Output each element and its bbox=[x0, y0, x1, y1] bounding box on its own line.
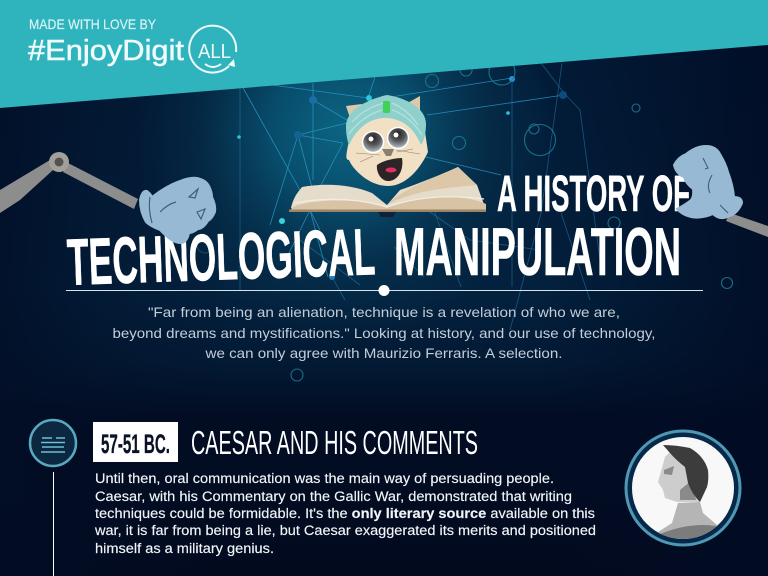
section body text: himself as a military genius. bbox=[95, 541, 274, 556]
section heading: CAESAR AND HIS COMMENTS bbox=[191, 424, 478, 461]
date badge bbox=[93, 422, 178, 462]
logo: made with love by EnjoyDigitAll: MADE WITH LOVE BY bbox=[29, 16, 157, 32]
timeline icon: text document bbox=[30, 420, 76, 466]
header band bbox=[0, 0, 768, 108]
logo: made with love by EnjoyDigitAll: ALL bbox=[198, 41, 231, 63]
intro quote: we can only agree with Maurizio Ferraris. A selection. bbox=[204, 345, 563, 361]
logo: made with love by EnjoyDigitAll: #EnjoyDigit bbox=[28, 35, 184, 67]
open book bbox=[289, 167, 486, 217]
right robotic arm bbox=[726, 213, 768, 237]
intro quote: beyond dreams and mystifications." Looking at history, and our use of technology, bbox=[112, 325, 656, 341]
network lines bbox=[243, 77, 564, 277]
right gloved hand bbox=[674, 146, 742, 218]
section body text: Until then, oral communication was the main way of persuading people. bbox=[95, 471, 554, 486]
section body text: Caesar, with his Commentary on the Gallic War, demonstrated that writing bbox=[95, 489, 572, 504]
intro quote: "Far from being an alienation, technique is a revelation of who we are, bbox=[148, 304, 620, 320]
left gloved hand bbox=[140, 178, 215, 243]
logo: made with love by EnjoyDigitAll bbox=[28, 16, 236, 73]
title rule bbox=[66, 285, 703, 296]
portrait of Caesar bbox=[626, 431, 740, 545]
timeline line bbox=[53, 472, 54, 576]
title: technological: TECHNOLOGICAL bbox=[66, 214, 376, 299]
section body text bbox=[94, 471, 596, 556]
section body text: techniques could be formidable. It's the only literary source available on this bbox=[95, 506, 595, 521]
left robotic arm bbox=[0, 152, 138, 213]
cat mascot with turban bbox=[346, 95, 428, 186]
date badge: 57-51 BC. bbox=[101, 429, 170, 459]
intro quote bbox=[112, 304, 656, 361]
section body text: war, it is far from being a lie, but Caesar exaggerated its merits and positioned bbox=[94, 523, 596, 538]
